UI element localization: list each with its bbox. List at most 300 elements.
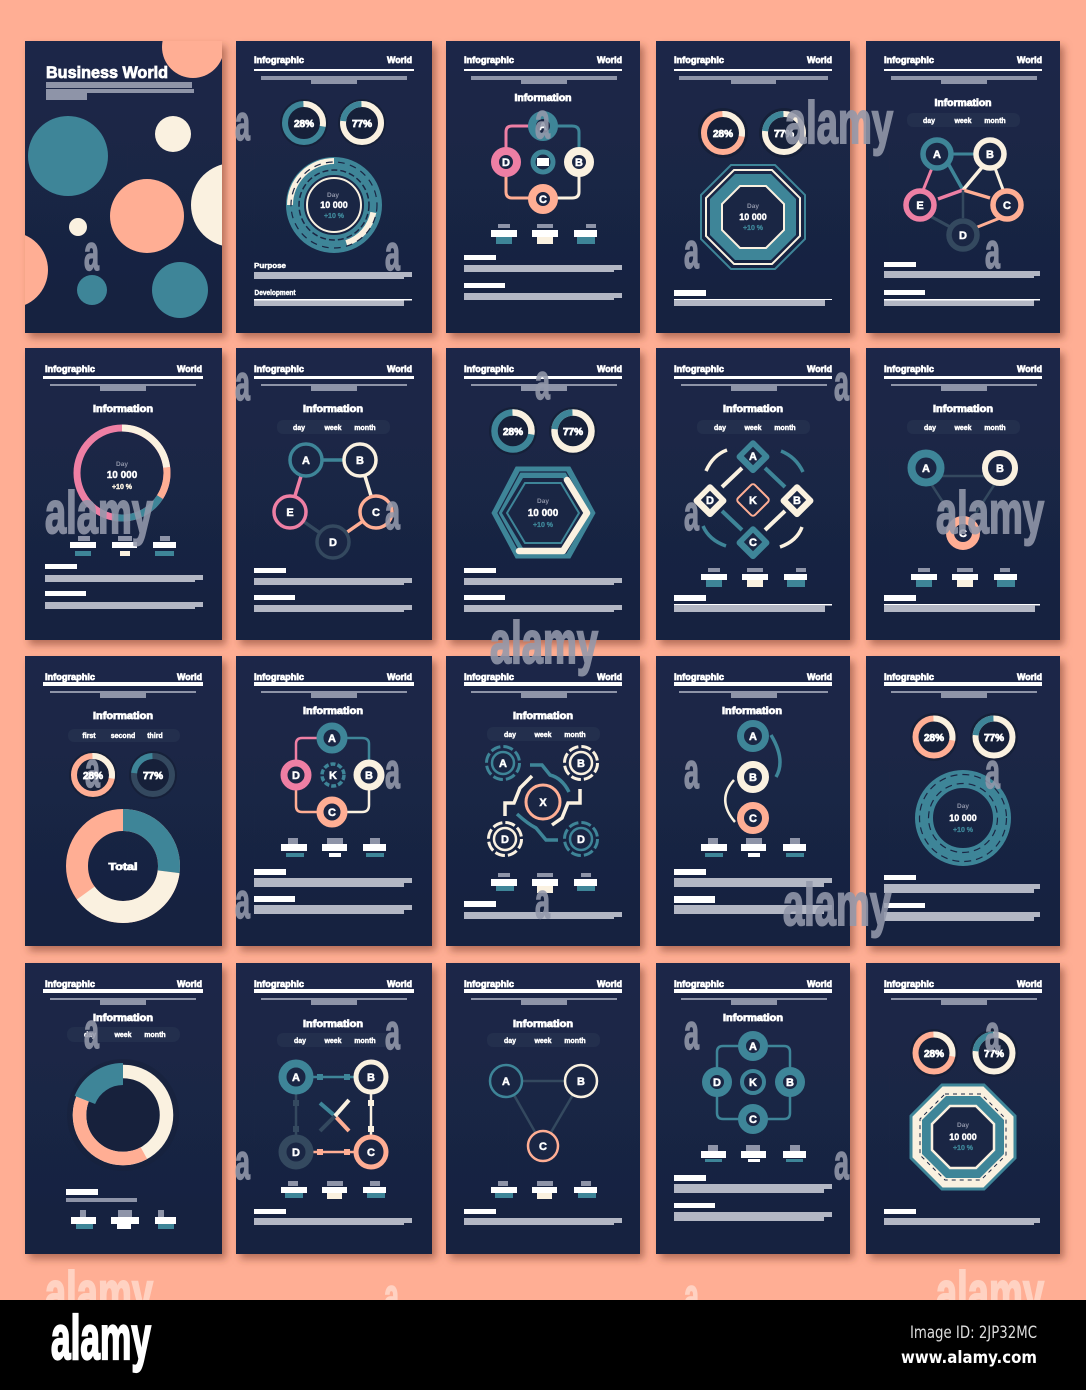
tabs: day <box>504 732 516 739</box>
cover title: Business World <box>46 63 168 82</box>
tabs <box>277 1033 390 1047</box>
percent circles <box>698 108 809 158</box>
header: World <box>177 672 202 682</box>
tabs: month <box>984 425 1006 432</box>
nodes <box>490 1065 597 1161</box>
stats <box>911 568 1017 587</box>
nodes: C <box>749 813 757 825</box>
heading: Information <box>934 98 992 109</box>
header: Infographic <box>464 672 514 682</box>
dial ring <box>290 161 378 249</box>
text: development <box>674 896 832 914</box>
header: World <box>597 979 622 989</box>
nodes: K <box>749 1077 757 1089</box>
header: Infographic <box>45 979 95 989</box>
tabs: month <box>354 425 376 432</box>
nodes: A <box>292 1072 300 1084</box>
ring: +10 % <box>112 484 133 491</box>
nodes: A <box>749 731 757 743</box>
heading: Information <box>513 1019 573 1030</box>
nodes: K <box>329 770 337 782</box>
card <box>236 348 432 640</box>
panel: teal cycle <box>656 963 850 1254</box>
nodes <box>284 726 381 824</box>
stats <box>701 838 806 857</box>
nodes: B <box>365 770 373 782</box>
tabs: week <box>953 425 972 432</box>
percent circles: 28% <box>924 733 944 744</box>
header: Infographic <box>254 672 304 682</box>
tabs: week <box>743 425 762 432</box>
tabs <box>68 729 180 742</box>
watermarks: a <box>985 1005 1001 1061</box>
links <box>922 154 1005 228</box>
donut chart <box>77 820 169 912</box>
panel: four node cycle <box>446 41 640 333</box>
percent circles: 77% <box>774 129 794 140</box>
percent circles <box>910 1029 1018 1077</box>
watermarks: a <box>384 1268 400 1324</box>
hexagon <box>492 467 595 558</box>
nodes: D <box>292 1147 300 1159</box>
links <box>290 460 376 542</box>
watermarks: a <box>985 743 1001 799</box>
header: World <box>177 364 202 374</box>
text: purpose <box>464 901 622 919</box>
watermarks: a <box>235 1134 251 1190</box>
tabs <box>487 1033 600 1047</box>
header: World <box>387 979 412 989</box>
octagon: Day <box>747 203 759 210</box>
card <box>446 348 640 640</box>
chain arcs <box>725 735 780 822</box>
header <box>884 55 1042 84</box>
card <box>656 41 850 333</box>
tabs: week <box>953 118 972 125</box>
nodes: C <box>749 537 757 549</box>
percent circles: 28% <box>713 129 733 140</box>
heading: Information <box>513 711 573 722</box>
nodes: C <box>749 1114 757 1126</box>
nodes: C <box>959 528 967 540</box>
cross arrows <box>320 1100 349 1131</box>
panel: five node ring <box>236 348 432 640</box>
hexagon: 10 000 <box>528 508 559 519</box>
footer logo: alamy <box>51 1304 151 1373</box>
card <box>236 656 432 946</box>
panel: hexagon chart <box>446 348 640 640</box>
tabs <box>907 420 1020 434</box>
connectors <box>722 468 785 530</box>
percent circles <box>280 99 386 147</box>
tabs <box>907 113 1020 127</box>
text: development <box>254 595 412 612</box>
tabs: month <box>984 118 1006 125</box>
card <box>446 41 640 333</box>
nodes: A <box>499 758 507 770</box>
header <box>43 979 203 1005</box>
percent circles <box>69 751 177 799</box>
tabs: week <box>113 1032 132 1039</box>
nodes: C <box>328 807 336 819</box>
watermarks: a <box>84 225 100 281</box>
watermarks: a <box>684 743 700 799</box>
header <box>464 364 622 391</box>
text: purpose <box>254 263 412 279</box>
stats <box>281 838 386 857</box>
header: Infographic <box>674 979 724 989</box>
card <box>25 656 222 946</box>
nodes: B <box>575 157 583 169</box>
text: development: Development <box>254 290 296 297</box>
text: purpose <box>464 1209 622 1225</box>
panel: five node network <box>866 41 1060 333</box>
header: Infographic <box>884 672 934 682</box>
watermarks: a <box>385 225 401 281</box>
tabs: third <box>147 733 163 740</box>
nodes <box>495 115 590 210</box>
panel: donut total <box>25 656 222 946</box>
header: Infographic <box>884 979 934 989</box>
watermarks: alamy <box>783 872 891 938</box>
ring chart <box>920 774 1006 862</box>
stats <box>71 1210 176 1229</box>
text: purpose <box>254 1209 412 1225</box>
card <box>236 963 432 1254</box>
card <box>446 656 640 946</box>
card <box>656 348 850 640</box>
header: Infographic <box>674 672 724 682</box>
ring: Day <box>116 461 128 468</box>
percent circles: 28% <box>924 1049 944 1060</box>
nodes: C <box>1003 200 1011 212</box>
header: World <box>1017 55 1042 65</box>
tabs: first <box>82 733 96 740</box>
site url: www.alamy.com <box>901 1348 1037 1368</box>
header <box>884 672 1042 698</box>
dial ring: Day <box>327 192 339 199</box>
nodes: E <box>916 200 924 212</box>
stats <box>281 1181 386 1199</box>
panel: octagon chart <box>656 41 850 333</box>
nodes <box>486 746 598 856</box>
connectors <box>717 1046 790 1119</box>
tabs: month <box>774 425 796 432</box>
nodes: B <box>749 772 757 784</box>
tabs <box>487 727 600 741</box>
nodes: A <box>328 733 336 745</box>
percent circles: 77% <box>984 1049 1004 1060</box>
nodes: B <box>356 455 364 467</box>
header <box>464 979 622 1005</box>
cover shapes <box>25 41 222 318</box>
header <box>254 979 414 1005</box>
header <box>254 364 414 391</box>
watermarks: a <box>684 1268 700 1324</box>
heading: Information <box>303 1019 363 1030</box>
header: Infographic <box>254 979 304 989</box>
tabs: day <box>294 1038 306 1045</box>
nodes <box>906 140 1021 249</box>
octagon <box>701 165 805 269</box>
heading: Information <box>514 93 572 104</box>
nodes: K <box>749 495 757 507</box>
octagon chart: Day <box>957 1122 969 1129</box>
nodes: C <box>539 1141 547 1153</box>
nodes: B <box>367 1072 375 1084</box>
heading: Information <box>722 706 782 717</box>
percent circles: 28% <box>503 427 523 438</box>
nodes: B <box>986 149 994 161</box>
text: purpose <box>45 564 203 582</box>
tabs: day <box>293 425 305 432</box>
text: purpose <box>884 1209 1040 1225</box>
nodes: C <box>539 194 547 206</box>
ring chart: Day <box>957 803 969 810</box>
watermarks: alamy <box>785 90 893 156</box>
header: Infographic <box>884 55 934 65</box>
percent circles: 77% <box>563 427 583 438</box>
header: Infographic <box>674 364 724 374</box>
header: World <box>387 55 412 65</box>
header: World <box>807 672 832 682</box>
panel: cycle with centre node <box>236 656 432 946</box>
header: World <box>807 55 832 65</box>
percent circles: 28% <box>294 119 314 130</box>
heading: Information <box>303 404 363 415</box>
heading: Information <box>723 404 783 415</box>
flow arrows <box>505 765 580 840</box>
text: purpose: Purpose <box>254 263 286 270</box>
cycle arrows <box>703 450 803 547</box>
connectors <box>506 126 579 198</box>
connectors <box>296 1077 371 1152</box>
stats <box>701 1145 806 1162</box>
tabs: day <box>84 1032 96 1039</box>
card <box>866 656 1060 946</box>
header <box>43 672 203 698</box>
text: development <box>464 595 622 612</box>
ring: 10 000 <box>107 470 138 481</box>
watermarks: alamy <box>490 610 598 676</box>
header: Infographic <box>674 55 724 65</box>
percent label over watermark: 28% <box>83 771 103 782</box>
watermarks: a <box>85 742 101 798</box>
stats <box>70 536 176 556</box>
text: development <box>464 283 622 300</box>
text: development <box>674 1203 832 1221</box>
nodes: A <box>749 451 757 463</box>
image id: Image ID: 2JP32MC <box>910 1323 1037 1343</box>
heading: Information <box>93 711 153 722</box>
dial ring: +10 % <box>324 213 345 220</box>
heading: Information <box>933 404 993 415</box>
tabs: week <box>323 1038 342 1045</box>
cover card <box>25 41 222 333</box>
connectors <box>296 738 369 812</box>
octagon: +10 % <box>743 225 764 232</box>
header: World <box>177 979 202 989</box>
heading: Information <box>93 1013 153 1024</box>
tabs: month <box>354 1038 376 1045</box>
header: World <box>597 672 622 682</box>
watermarks: a <box>84 1003 100 1059</box>
nodes: D <box>501 834 509 846</box>
header <box>43 364 203 391</box>
header <box>674 55 832 84</box>
panel: vertical chain <box>656 656 850 946</box>
nodes: A <box>749 1041 757 1053</box>
watermarks: alamy <box>45 480 153 546</box>
tabs: month <box>564 732 586 739</box>
ring <box>77 428 167 518</box>
header: World <box>597 364 622 374</box>
triangle links <box>506 1081 581 1146</box>
card <box>236 41 432 333</box>
watermarks: a <box>535 93 551 149</box>
ring chart: 10 000 <box>949 813 977 823</box>
header: World <box>387 672 412 682</box>
watermarks: a <box>385 484 401 540</box>
tabs: day <box>924 425 936 432</box>
header <box>884 364 1042 391</box>
card <box>25 963 222 1254</box>
nodes <box>706 1035 801 1130</box>
watermarks: a <box>684 485 700 541</box>
panel: ring with shadow <box>25 963 222 1254</box>
text: purpose <box>884 875 1040 893</box>
nodes <box>282 1062 386 1167</box>
header: Infographic <box>464 979 514 989</box>
nodes: C <box>372 507 380 519</box>
header: Infographic <box>45 364 95 374</box>
text: development <box>45 591 203 609</box>
text: development <box>884 290 1040 306</box>
text: purpose <box>674 869 832 887</box>
text: purpose <box>884 262 1040 278</box>
panel: large octagon <box>866 963 1060 1254</box>
header: World <box>597 55 622 65</box>
text: purpose <box>674 595 832 612</box>
nodes: A <box>302 455 310 467</box>
text: development <box>884 903 1040 921</box>
tabs: week <box>533 732 552 739</box>
panel: four corners with cross <box>236 963 432 1254</box>
nodes: B <box>996 463 1004 475</box>
panel: cover Business World <box>24 41 231 343</box>
watermarks: a <box>235 873 251 929</box>
nodes: D <box>713 1077 721 1089</box>
watermarks: a <box>985 223 1001 279</box>
header: Infographic <box>45 672 95 682</box>
tabs <box>697 420 810 434</box>
text: purpose <box>66 1189 137 1202</box>
cover subtitle <box>46 82 194 100</box>
tabs: day <box>504 1038 516 1045</box>
tabs: week <box>533 1038 552 1045</box>
footer bar <box>0 1300 1086 1390</box>
nodes <box>692 439 815 560</box>
tabs: week <box>323 425 342 432</box>
header <box>254 672 414 698</box>
text: purpose <box>254 568 412 585</box>
watermarks: alamy <box>45 1260 153 1326</box>
hexagon: +10 % <box>533 522 554 529</box>
card <box>866 348 1060 640</box>
header <box>674 672 832 698</box>
octagon chart <box>911 1085 1015 1189</box>
ring chart: +10 % <box>953 827 974 834</box>
text: purpose <box>254 869 412 887</box>
header: Infographic <box>464 364 514 374</box>
nodes: B <box>577 758 585 770</box>
heading: Information <box>303 706 363 717</box>
header: World <box>1017 364 1042 374</box>
nodes: A <box>502 1076 510 1088</box>
watermarks: a <box>535 873 551 929</box>
header: World <box>1017 672 1042 682</box>
stats <box>491 873 597 893</box>
nodes <box>912 453 1015 546</box>
card <box>656 963 850 1254</box>
tabs: month <box>564 1038 586 1045</box>
header <box>674 364 832 391</box>
header: Infographic <box>884 364 934 374</box>
nodes: B <box>793 495 801 507</box>
percent circles <box>489 407 597 455</box>
nodes: A <box>539 121 547 133</box>
watermarks: a <box>385 743 401 799</box>
watermarks: a <box>834 1134 850 1190</box>
octagon: 10 000 <box>739 212 767 222</box>
heading: Information <box>723 1013 783 1024</box>
nodes <box>740 724 766 830</box>
header: Infographic <box>254 364 304 374</box>
nodes: A <box>922 463 930 475</box>
watermarks: a <box>235 355 251 411</box>
panel: circular ring chart <box>236 41 432 333</box>
nodes: B <box>577 1076 585 1088</box>
card <box>866 41 1060 333</box>
nodes: D <box>502 157 510 169</box>
triangle links <box>926 476 1000 533</box>
heading: Information <box>93 404 153 415</box>
watermarks: a <box>684 1004 700 1060</box>
tabs <box>277 420 390 434</box>
card <box>866 963 1060 1254</box>
text: purpose <box>464 568 622 585</box>
tabs <box>67 1027 180 1042</box>
octagon chart: +10 % <box>953 1145 974 1152</box>
panel: triangle of nodes <box>446 963 640 1254</box>
nodes: D <box>292 770 300 782</box>
nodes <box>274 444 392 558</box>
header <box>464 672 622 698</box>
percent circles: 77% <box>984 733 1004 744</box>
header <box>884 979 1042 1005</box>
stats <box>701 568 807 587</box>
header: World <box>807 979 832 989</box>
header: World <box>807 364 832 374</box>
panel: three node triangle <box>866 348 1060 640</box>
nodes: C <box>367 1147 375 1159</box>
nodes: A <box>933 149 941 161</box>
percent circles: 77% <box>352 119 372 130</box>
panel: diamond map <box>656 348 850 640</box>
hexagon: Day <box>537 498 549 505</box>
percent circles: 77% <box>143 771 163 782</box>
nodes: E <box>286 507 294 519</box>
